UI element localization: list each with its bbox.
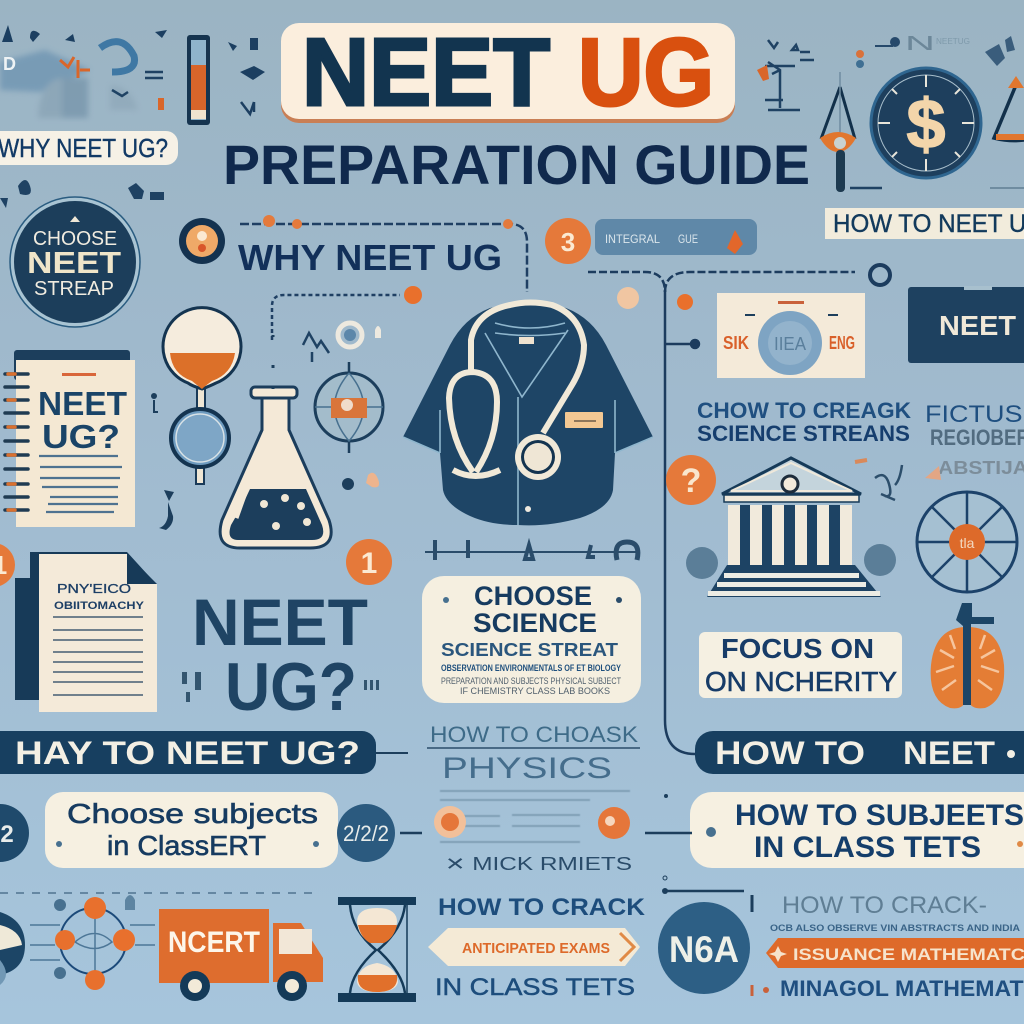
icon: ncert truck <box>159 909 323 1001</box>
ecg line <box>425 540 640 560</box>
card: focus on: ON NCHERITY <box>705 666 897 697</box>
card: choose subjects <box>45 792 338 868</box>
text: how to crack science: CHOW TO CREAGK <box>697 398 911 423</box>
pill: hay to neet ug <box>0 731 376 774</box>
card: choose science: IF CHEMISTRY CLASS LAB BOOKS <box>460 686 610 696</box>
card: focus on <box>699 632 902 698</box>
name tag <box>565 412 603 428</box>
text: faded how to crack: HOW TO CRACK- <box>782 892 987 919</box>
dark badge 222 <box>337 804 395 862</box>
collar and placket <box>403 323 653 525</box>
text: right faded labels <box>925 401 1024 480</box>
banner arrow: ANTICIPATED EXAMS <box>462 940 610 957</box>
card: seal certificate: SIK <box>723 333 749 353</box>
decorative medical sketch top left: D <box>3 54 16 74</box>
icon: balance stand <box>757 40 814 110</box>
orange badge question: ? <box>681 462 701 500</box>
card: choose subjects: Choose subjects <box>67 798 318 829</box>
small connector marks <box>151 335 273 530</box>
icon: orange left badge <box>0 543 15 587</box>
card: seal certificate: IIEA <box>774 334 806 354</box>
decorative leaf sketch <box>855 460 902 500</box>
banner arrow <box>428 928 640 966</box>
connector stub <box>376 752 408 754</box>
small orange dots <box>617 287 693 310</box>
blue label bar: INTEGRAL <box>605 232 660 246</box>
icon: test tube label <box>187 35 210 125</box>
heading: big neet ug <box>182 585 392 725</box>
card: how to subjects <box>690 792 1024 868</box>
banner: mathematics: ISSUANCE MATHEMATC <box>793 945 1024 964</box>
pill: how to neet right: HOW TO <box>715 735 865 771</box>
icon: spoked wheel <box>917 492 1017 592</box>
pill: how to neet right: NEET <box>903 735 995 771</box>
paper heading: PNY'EICO <box>57 581 131 596</box>
dark badge left <box>0 804 29 862</box>
decorative marks around pill <box>0 180 164 208</box>
orange badge 3: 3 <box>561 227 575 257</box>
icon: hourglass lens <box>163 308 241 484</box>
physics text block: ✕ MICK RMIETS <box>445 854 632 874</box>
icon: brain <box>931 603 1004 708</box>
text: right faded labels: ABSTIJA <box>938 458 1024 478</box>
physics text block: PHYSICS <box>442 752 612 785</box>
text: right faded labels: FICTUSI <box>925 401 1024 428</box>
title word NEET: NEET <box>302 19 550 126</box>
text: how to crack: HOW TO CRACK <box>438 894 646 921</box>
card: choose science: PREPARATION AND SUBJECTS PHYSICAL SUBJECT <box>441 676 621 686</box>
card: choose science <box>422 576 641 703</box>
decorative small marks beside title <box>228 38 265 114</box>
dark badge left: 2 <box>0 821 14 848</box>
pill: how to neet right <box>695 731 1024 774</box>
icon: balance scale right <box>990 76 1024 188</box>
heading: big neet ug: UG? <box>225 649 357 725</box>
card: how to subjects: IN CLASS TETS <box>754 831 981 864</box>
text: minagol mathematics: MINAGOL MATHEMATI <box>780 976 1024 1001</box>
badge: n6a: N6A <box>669 929 739 970</box>
physics text block <box>427 722 640 874</box>
banner: mathematics <box>766 938 1024 968</box>
card: choose subjects: in ClassERT <box>107 830 266 861</box>
badge: choose neet stream <box>10 197 140 327</box>
orange badge 1: 1 <box>361 547 377 580</box>
card: choose science: SCIENCE STREAT <box>441 640 618 660</box>
card: neet dark: NEET <box>939 310 1016 341</box>
icon: dollar dial <box>871 68 981 178</box>
title word UG: UG <box>578 19 714 126</box>
icon: dollar dial: $ <box>907 85 945 163</box>
card: neet dark <box>908 286 1024 363</box>
panel: notebook <box>5 350 135 527</box>
card: choose science: OBSERVATION ENVIRONMENTALS OF ET BIOLOGY <box>441 663 621 673</box>
orange badge 3 <box>545 218 591 264</box>
pill: why neet ug: WHY NEET UG? <box>0 133 168 163</box>
title card <box>281 19 735 126</box>
decorative faint text top right <box>856 33 1015 68</box>
decorative faint text top right: NEETUG <box>936 37 970 46</box>
text: faded how to crack <box>770 892 1021 933</box>
small lens icon <box>303 323 381 362</box>
heading: why neet ug: WHY NEET UG <box>238 237 502 278</box>
icon: network nodes <box>30 895 155 990</box>
card: choose science: CHOOSE <box>474 581 592 611</box>
right flow connector <box>588 265 890 754</box>
icon: institution building <box>686 458 896 597</box>
decorative faint text top right: N <box>905 33 935 55</box>
connector middle right <box>645 794 752 912</box>
card: seal certificate <box>717 293 865 378</box>
dotted connector lower <box>272 286 422 340</box>
icon: globe left <box>0 912 25 985</box>
notebook spiral <box>5 374 28 510</box>
text: how to crack science: SCIENCE STREANS <box>697 421 910 446</box>
icon: doctor coat with stethoscope <box>403 302 653 525</box>
stethoscope <box>471 302 584 433</box>
dotted connector top <box>240 215 527 292</box>
icon: balance scale left <box>820 72 882 192</box>
heading: big neet ug: NEET <box>192 585 368 659</box>
dotted row <box>0 892 320 894</box>
badge: n6a <box>658 902 750 994</box>
badge: choose neet stream: STREAP <box>34 278 114 300</box>
icon: target dial <box>315 362 383 490</box>
text: how to crack science <box>697 398 911 446</box>
icon: hourglass <box>338 897 416 1002</box>
blue label bar <box>595 219 757 255</box>
physics text block: HOW TO CHOASK <box>430 722 638 747</box>
panel: physics paper <box>15 552 157 712</box>
blue label bar: GUE <box>678 232 698 246</box>
decorative medical sketch top left <box>0 25 171 118</box>
text: faded how to crack: OCB ALSO OBSERVE VIN ABSTRACTS AND INDIA <box>770 923 1021 933</box>
dark badge 222: 2/2/2 <box>343 821 389 846</box>
panel: physics paper: OBIITOMACHY <box>54 600 145 612</box>
card: focus on: FOCUS ON <box>721 633 874 664</box>
orange badge 1 <box>346 539 392 585</box>
icon: flask <box>220 387 331 548</box>
connector stub middle <box>400 832 422 834</box>
subtitle: PREPARATION GUIDE <box>223 133 810 196</box>
text: in class tests: IN CLASS TETS <box>435 974 635 1001</box>
orange badge question <box>666 455 716 505</box>
pill: hay to neet ug: HAY TO NEET UG? <box>15 735 360 771</box>
card: seal certificate: ENG <box>829 333 855 353</box>
panel: notebook: UG? <box>42 418 120 455</box>
badge: choose neet stream: NEET <box>27 245 121 280</box>
icon: spoked wheel: tla <box>960 535 975 551</box>
badge: choose neet stream: CHOOSE <box>33 228 117 250</box>
notebook text: NEET <box>38 385 127 422</box>
numbered badge <box>179 218 225 264</box>
card: how to subjects: HOW TO SUBJEETS <box>735 799 1024 832</box>
icon: ncert truck: NCERT <box>168 926 260 959</box>
card: choose science: SCIENCE <box>473 608 597 638</box>
